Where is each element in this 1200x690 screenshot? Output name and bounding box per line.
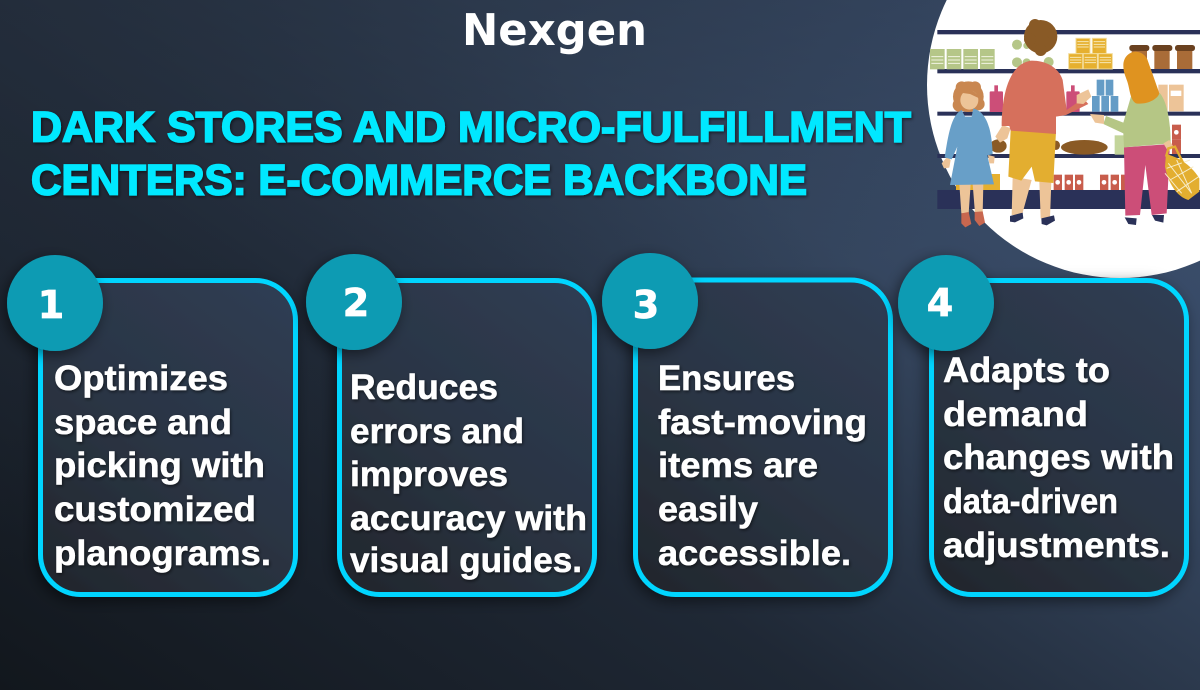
card 2 number badge xyxy=(306,254,402,350)
card 4 text: data-driven xyxy=(943,482,1118,521)
illustration: shoppers at shelves xyxy=(927,0,1200,278)
card 1 panel xyxy=(40,280,296,594)
card 1 number badge xyxy=(7,255,103,351)
card 2 text: Reduces xyxy=(350,368,498,407)
card 1 xyxy=(7,255,296,594)
title xyxy=(31,104,911,204)
card 4 text xyxy=(943,351,1174,565)
woman with orange hair xyxy=(1090,52,1199,225)
card 1 number badge: 1 xyxy=(38,283,64,327)
card 3 text xyxy=(658,359,867,573)
card 4 number badge: 4 xyxy=(927,281,953,325)
card 1 text xyxy=(54,359,271,573)
card 1 text: planograms. xyxy=(54,534,271,573)
card 2 text: errors and xyxy=(350,412,524,451)
card 3 text: accessible. xyxy=(658,534,851,573)
girl in blue dress xyxy=(942,81,995,227)
card 1 text: picking with xyxy=(54,446,265,485)
card 2 xyxy=(306,254,594,594)
card 3 number badge: 3 xyxy=(633,283,659,327)
card 4 panel xyxy=(932,280,1186,594)
card 4 text: demand xyxy=(943,395,1088,434)
card 4 text: adjustments. xyxy=(943,526,1170,565)
card 3 text: items are xyxy=(658,446,818,485)
card 2 text: improves xyxy=(350,455,508,494)
card 1 text: space and xyxy=(54,403,232,442)
card 2 panel xyxy=(340,280,594,594)
brand name: Nexgen xyxy=(462,5,647,56)
card 1 text: Optimizes xyxy=(54,359,228,398)
title: DARK STORES AND MICRO-FULFILLMENT xyxy=(31,104,911,152)
card 2 number badge: 2 xyxy=(343,281,369,325)
card 1 text: customized xyxy=(54,490,256,529)
card 3 panel xyxy=(636,280,890,594)
card 4 number badge xyxy=(898,255,994,351)
card 4 xyxy=(898,255,1186,594)
shelf products xyxy=(930,38,1195,190)
card 2 text: visual guides. xyxy=(350,541,582,580)
card 3 text: fast-moving xyxy=(658,403,867,442)
card 2 text: accuracy with xyxy=(350,499,587,538)
card 4 text: changes with xyxy=(943,438,1174,477)
card 2 text xyxy=(350,368,587,580)
card 3 xyxy=(602,253,890,594)
woman with brown hair xyxy=(995,19,1091,225)
shelves xyxy=(937,30,1200,209)
card 3 text: Ensures xyxy=(658,359,795,398)
card 3 text: easily xyxy=(658,490,759,529)
card 4 text: Adapts to xyxy=(943,351,1110,390)
card 3 number badge xyxy=(602,253,698,349)
title: CENTERS: E-COMMERCE BACKBONE xyxy=(31,156,807,204)
